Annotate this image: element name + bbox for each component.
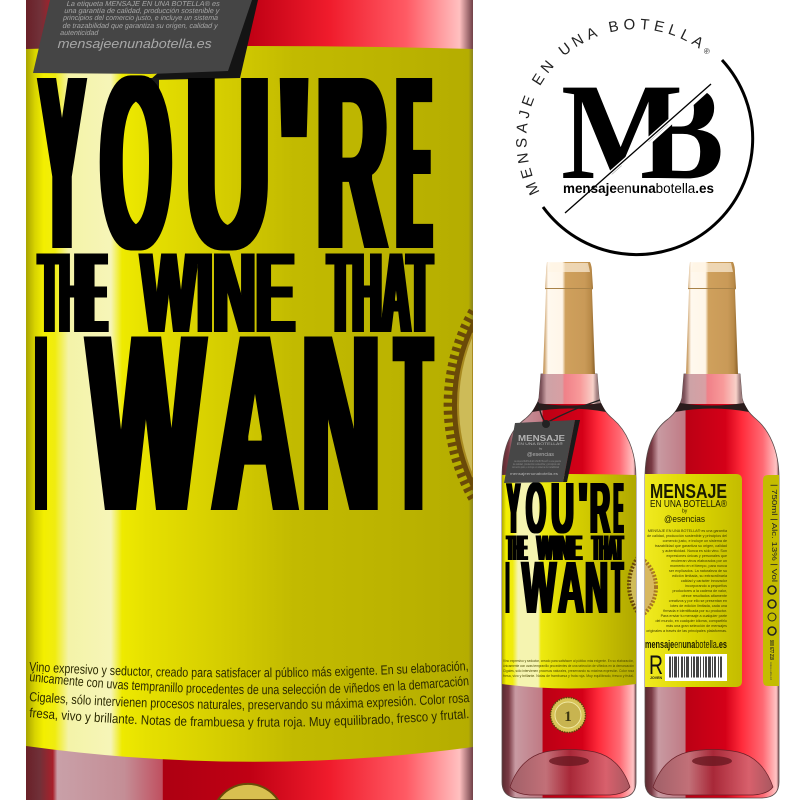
heading: YOU'RE: U: [186, 21, 270, 304]
back label brand: MENSAJE: [650, 481, 727, 503]
gold seal edge on large label: [448, 311, 473, 499]
panel: front bottle: [502, 262, 636, 798]
back label paragraph: ser explicados. La naturaleza de su: [669, 569, 727, 573]
back label paragraph: creativos y por ello se presentan en: [669, 599, 727, 603]
hanging tag on large bottle: mensajeenunabotella.es: [57, 36, 213, 51]
side label: [763, 475, 779, 686]
logo url: mensajeenunabotella.es: [563, 180, 714, 196]
text: T: [397, 278, 430, 567]
back label paragraph: momento en el tiempo, para nunca: [670, 564, 728, 568]
front heading: A: [558, 546, 584, 629]
gold seal: 1: [564, 709, 572, 725]
front heading: ': [578, 468, 588, 549]
heading: YOU'RE: R: [317, 21, 387, 304]
back label paragraph: edición limitada, su extraordinaria: [672, 574, 728, 578]
back label paragraph: encierran vinos elaborados por un: [671, 559, 727, 563]
hanging tag: La etiqueta MENSAJE EN UNA BOTELLA® es una garantía: [514, 460, 561, 463]
back label paragraph: Para enviar tu mensaje a cualquier parte: [661, 614, 727, 618]
hanging tag on large bottle: una garantía de calidad, producción sostenible y: [64, 6, 220, 15]
heading: I WANT: W: [88, 278, 205, 567]
text block: wine description: Cigales, sólo intervienen procesos naturales, preservando su máxima expresión. Color rosa: [30, 692, 470, 712]
front description: Vino expresivo y seductor, creado para satisfacer al público más exigente. En su elaboración,: [503, 658, 634, 663]
rueda R mark: R: [649, 650, 663, 680]
back label paragraph: más una gran selección de mensajes: [666, 624, 727, 628]
heading: YOU'RE: ': [277, 21, 311, 304]
back label paragraph: firmada e identificada por su productor.: [663, 609, 727, 613]
panel: large bottle close-up: [26, 0, 473, 800]
front description: fresa, vivo y brillante. Notas de frambuesa y fruta roja. Muy equilibrado, fresco y frutal.: [503, 673, 634, 678]
back label: [645, 474, 742, 687]
back label paragraph: [646, 529, 728, 633]
heading: THE WINE THAT: THE: [39, 227, 107, 358]
front heading: N: [585, 546, 608, 629]
rueda R mark: JOVEN: [650, 675, 662, 680]
heading: I WANT: N: [302, 278, 380, 567]
back label paragraph: incorporando a pequeños: [685, 584, 727, 588]
hanging tag: [504, 420, 580, 483]
circle arc: [543, 60, 753, 255]
back label paragraph: y autenticidad. Nunca es sólo vino. Son: [662, 549, 727, 553]
front heading: [506, 468, 623, 629]
back label url: mensajeenunabotella.es: [645, 639, 727, 651]
back label paragraph: ofrece resultados altamente: [681, 594, 727, 598]
back label paragraph: lotes de edición limitada, cada una: [670, 604, 728, 608]
front heading: R: [590, 468, 610, 549]
hanging tag on large bottle: principios del comercio justo, e incluye un sistema: [62, 13, 218, 22]
text block: wine description: Vino expresivo y seductor, creado para satisfacer al público más exigente. En su elaboración,: [30, 661, 468, 680]
circular brand text: MENSAJE EN UNA BOTELLA®: [516, 18, 710, 196]
front heading: W: [522, 546, 556, 629]
side label: | 750ml | Alc. 13% | Vol: [770, 484, 779, 582]
panel: front bottle: E: [614, 468, 623, 549]
hanging tag: MENSAJE: [518, 434, 566, 443]
wine above label: [26, 0, 473, 52]
back label paragraph: productores a la cadena de valor,: [672, 589, 727, 593]
seal edge on front label: [627, 557, 636, 613]
heading: THE WINE THAT: WINE: [141, 227, 295, 358]
hanging tag: EN UNA BOTELLA®: [517, 441, 563, 446]
text block: wine description: únicamente con uvas tempranillo procedentes de una selección de viñedos en la demarcación: [30, 672, 468, 696]
text: E: [398, 21, 430, 304]
side label: 900 677 219: [768, 640, 774, 660]
text block: wine description: [30, 661, 470, 730]
back label paragraph: trazabilidad que garantiza su origen, calidad: [655, 544, 727, 548]
hanging tag: comercio justo, e incluye un sistema de trazabilidad: [512, 466, 559, 469]
panel: front bottle: T: [612, 546, 623, 629]
wine below label: [26, 740, 473, 800]
front description: [503, 658, 635, 678]
front heading: WINE: [537, 529, 582, 568]
front heading: THE: [507, 529, 527, 568]
hanging tag: de calidad, producción sostenible y principios del: [513, 463, 560, 466]
back label paragraph: MENSAJE EN UNA BOTELLA® es una garantía: [648, 529, 728, 533]
front label: [502, 474, 636, 688]
back label brand: EN UNA BOTELLA®: [650, 498, 727, 510]
barcode: [665, 654, 727, 681]
back label paragraph: expresiones únicas y personales que: [666, 554, 727, 558]
front heading: I: [506, 546, 508, 629]
large yellow label: [26, 46, 473, 762]
panel: back bottle: [644, 262, 780, 798]
back label brand: by: [682, 508, 688, 514]
hanging tag: by: [539, 446, 543, 450]
hanging tag: @esencias: [527, 452, 555, 458]
front heading: O: [526, 468, 546, 549]
diagonal slash: [565, 84, 711, 213]
back label paragraph: de calidad, producción sostenible y principios del: [647, 534, 727, 538]
hanging tag on large bottle: [33, 0, 258, 90]
back label paragraph: del mundo, en cualquier idioma, compartirlo: [655, 619, 727, 623]
back label paragraph: originales a través de las principales plataformas.: [646, 629, 727, 633]
hanging tag on large bottle: de trazabilidad que garantiza su origen, calidad y: [62, 21, 218, 30]
hanging tag: mensajeenunabotella.es: [510, 472, 558, 476]
heading: YOU'RE: Y: [40, 21, 84, 304]
letter B: B: [640, 55, 724, 208]
heading: I WANT: A: [212, 278, 298, 567]
text block: wine description: fresa, vivo y brillante. Notas de frambuesa y fruta roja. Muy equilibrado, fresco y frutal.: [30, 708, 468, 730]
front description: únicamente con uvas tempranillo procedentes de una selección de viñedos en la demarcación: [503, 663, 634, 668]
front description: Cigales, sólo intervienen procesos naturales, preservando su máxima expresión. Color rosa: [503, 668, 635, 673]
hanging tag on large bottle: autenticidad: [60, 28, 100, 37]
logo: round MB mark: [516, 18, 754, 256]
neck cord: [538, 400, 600, 423]
back label brand: @esencias: [664, 514, 705, 525]
letter M: M: [561, 55, 683, 208]
front heading: U: [551, 468, 574, 549]
text: THAT: [328, 227, 432, 358]
gold seal: [550, 698, 586, 732]
back label paragraph: comercio justo, e incluye un sistema de: [663, 539, 727, 543]
gold seal on large bottle base: [218, 784, 278, 800]
front heading: Y: [507, 468, 520, 549]
heading: I WANT: I: [39, 278, 43, 567]
heading: YOU'RE: O: [101, 21, 171, 304]
back label brand: [650, 481, 727, 525]
panel: front bottle: THAT: [592, 529, 623, 568]
back label paragraph: calidad y carácter innovador: [681, 579, 728, 583]
side label: Contiene sulfitos. ES: [769, 662, 773, 680]
seal edge seen through bottle: [645, 559, 658, 615]
